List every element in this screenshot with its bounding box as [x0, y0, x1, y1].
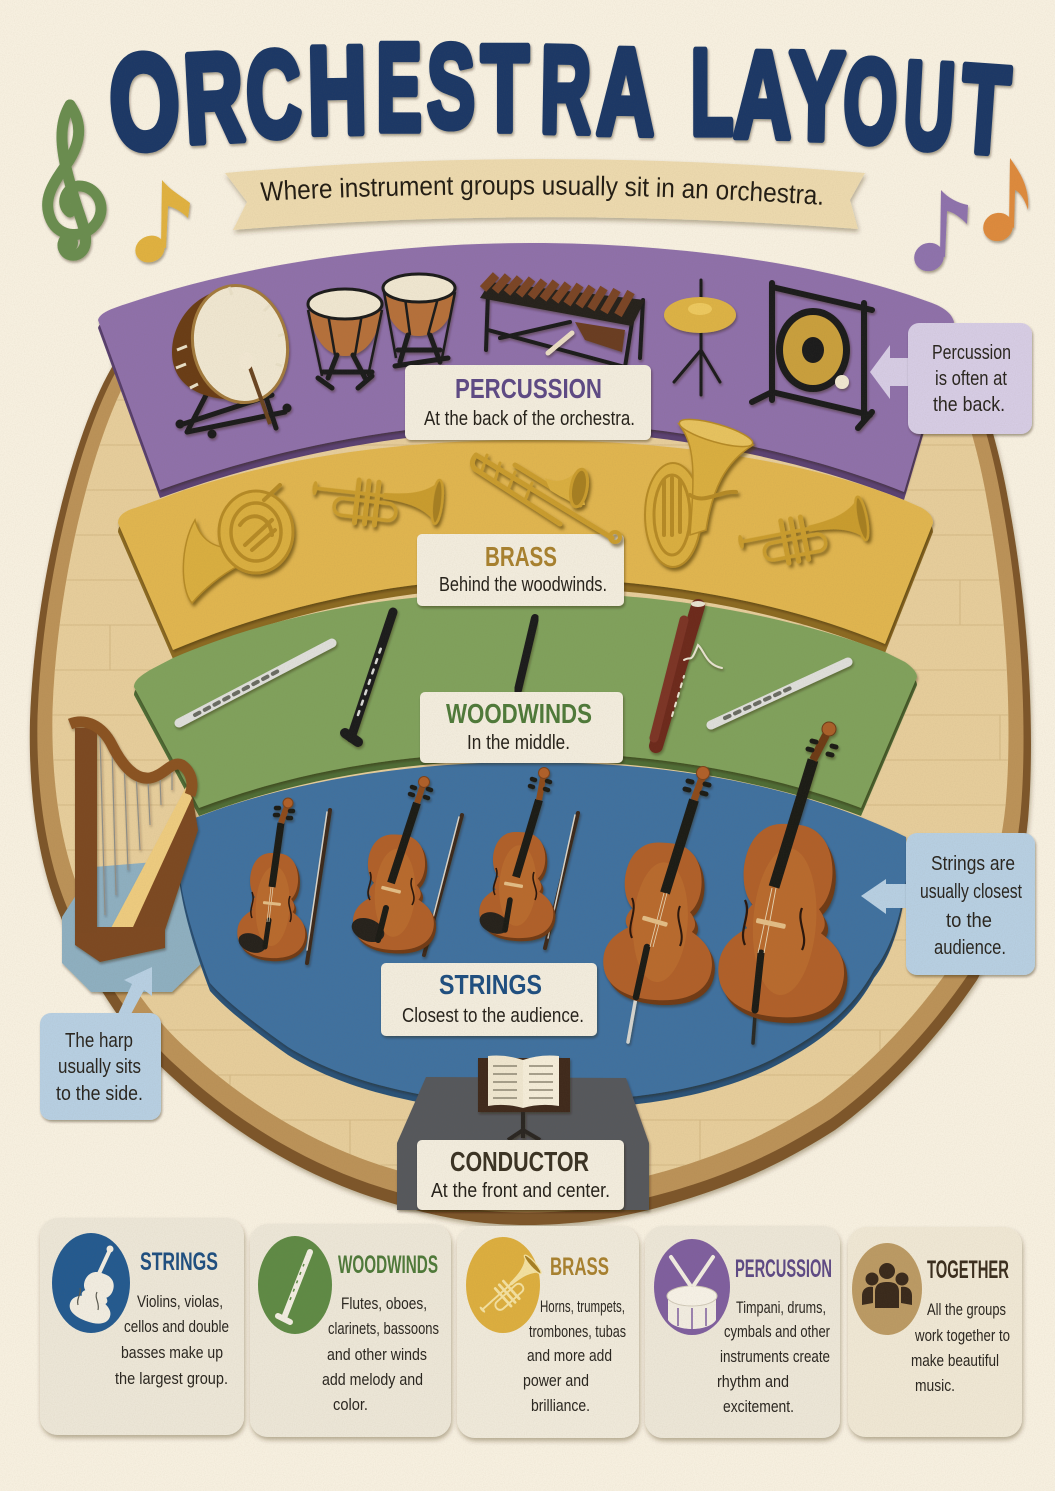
label: brass: Behind the woodwinds. — [439, 574, 607, 596]
callout: strings: to the — [946, 910, 992, 932]
icon: double bass — [715, 722, 858, 1043]
icon: violin badge — [52, 1233, 130, 1333]
title: O — [841, 33, 900, 169]
label: woodwinds — [420, 692, 623, 763]
icon: clarinet — [345, 612, 393, 742]
icon: flute right — [711, 662, 848, 725]
card: percussion — [645, 1226, 840, 1438]
label: strings — [381, 963, 597, 1036]
card: woodwinds: WOODWINDS — [338, 1251, 438, 1279]
icon: trumpet badge — [466, 1237, 546, 1333]
title: T — [481, 19, 529, 156]
harp platform — [62, 860, 215, 992]
callout: strings: audience. — [934, 937, 1006, 959]
card: brass — [457, 1226, 639, 1438]
label: percussion — [405, 365, 651, 440]
card: woodwinds: color. — [333, 1395, 368, 1414]
card: woodwinds: and other winds — [327, 1345, 427, 1364]
card: percussion: instruments create — [720, 1347, 830, 1366]
title: R — [180, 26, 247, 170]
icon: orange note — [978, 158, 1028, 246]
label: woodwinds: In the middle. — [467, 732, 570, 754]
card: together: work together to — [914, 1326, 1010, 1345]
icon: drum badge — [654, 1239, 730, 1335]
callout: percussion: Percussion — [932, 342, 1011, 364]
card: strings: basses make up — [121, 1343, 223, 1362]
callout: strings — [861, 833, 1035, 975]
icon: gong — [752, 283, 872, 428]
label: brass — [417, 534, 624, 606]
title — [106, 18, 1014, 180]
card: strings: the largest group. — [115, 1369, 228, 1388]
icon: violin 3 — [476, 768, 560, 943]
panel: brass — [118, 414, 933, 659]
panel: woodwinds — [134, 592, 917, 816]
label: percussion: PERCUSSION — [455, 373, 602, 404]
callout: percussion: the back. — [933, 394, 1005, 416]
callout: strings: Strings are — [931, 853, 1015, 875]
callout: percussion: is often at — [935, 368, 1007, 390]
label: conductor — [417, 1140, 624, 1210]
icon: trombone — [472, 455, 620, 542]
card: together — [848, 1227, 1022, 1437]
card: percussion: PERCUSSION — [735, 1255, 832, 1283]
card: percussion: rhythm and — [717, 1372, 789, 1391]
icon: cello — [600, 766, 723, 1042]
icon: bows — [307, 810, 578, 963]
callout: percussion — [870, 323, 1032, 434]
card: strings: STRINGS — [140, 1248, 218, 1276]
callout: harp: usually sits — [58, 1056, 141, 1078]
icon: hi-hat cymbal — [664, 280, 736, 395]
icon: french horn — [183, 485, 293, 603]
icon: timpani pair — [308, 274, 455, 388]
icon: bass drum — [172, 277, 298, 438]
card: strings: cellos and double — [124, 1317, 229, 1336]
title: U — [900, 36, 958, 176]
icon: treble clef — [48, 105, 101, 255]
icon: clarinet badge — [258, 1236, 332, 1334]
subtitle banner — [225, 159, 868, 236]
icon: oboe — [518, 618, 535, 690]
icon: marimba — [480, 275, 645, 367]
card: together: music. — [915, 1376, 955, 1395]
card: percussion: excitement. — [723, 1397, 794, 1416]
card: woodwinds: add melody and — [322, 1370, 423, 1389]
label: conductor: At the front and center. — [431, 1180, 610, 1202]
label: strings: Closest to the audience. — [402, 1005, 584, 1027]
icon: harp — [70, 722, 198, 962]
icon: purple note — [909, 190, 968, 276]
card: together: make beautiful — [911, 1351, 999, 1370]
title: T — [956, 38, 1014, 180]
icon: yellow note — [131, 180, 190, 267]
icon: people badge — [852, 1243, 922, 1335]
card: percussion: Timpani, drums, — [736, 1298, 826, 1317]
card: woodwinds: Flutes, oboes, — [341, 1294, 427, 1313]
icon: music stand — [478, 1056, 570, 1140]
label: conductor: CONDUCTOR — [450, 1146, 589, 1177]
title: E — [376, 18, 422, 157]
title: A — [596, 22, 656, 161]
icon: trumpet right — [734, 496, 872, 572]
title: H — [306, 22, 368, 161]
card: woodwinds — [250, 1224, 451, 1437]
icon: bassoon — [654, 601, 722, 746]
card: brass: power and — [523, 1371, 589, 1390]
card: strings — [40, 1218, 244, 1435]
panel: strings — [178, 722, 906, 1105]
subtitle banner: Where instrument groups usually sit in an orchestra. — [260, 176, 822, 205]
icon: violin 2 — [348, 776, 441, 956]
icon: violin 1 — [236, 798, 311, 963]
callout: harp: to the side. — [56, 1083, 143, 1105]
card: strings: Violins, violas, — [137, 1292, 223, 1311]
callout: harp — [40, 967, 161, 1120]
label: strings: STRINGS — [439, 969, 542, 1000]
card: brass: trombones, tubas — [529, 1322, 626, 1341]
card: brass: brilliance. — [531, 1396, 590, 1415]
title: O — [106, 27, 183, 179]
label: brass: BRASS — [485, 541, 557, 572]
title: A — [733, 25, 793, 164]
icon: flute left — [179, 643, 332, 723]
title: Y — [788, 26, 846, 166]
title: S — [427, 21, 475, 152]
title: R — [539, 21, 592, 159]
title: L — [691, 25, 733, 161]
label: woodwinds: WOODWINDS — [446, 698, 592, 729]
callout: strings: usually closest — [920, 881, 1022, 903]
card: brass: and more add — [527, 1346, 612, 1365]
icon: tuba — [645, 414, 755, 567]
card: woodwinds: clarinets, bassoons — [328, 1319, 439, 1338]
panel: percussion — [98, 243, 954, 500]
stage platform — [0, 340, 1055, 1225]
card: brass: BRASS — [550, 1253, 609, 1281]
callout: harp: The harp — [65, 1030, 133, 1052]
title: C — [244, 25, 303, 163]
panel: conductor — [397, 1056, 649, 1210]
card: brass: Horns, trumpets, — [540, 1297, 625, 1316]
card: together: All the groups — [927, 1300, 1006, 1319]
card: percussion: cymbals and other — [724, 1322, 830, 1341]
icon: trumpet left — [309, 466, 445, 532]
label: percussion: At the back of the orchestra. — [424, 408, 635, 430]
